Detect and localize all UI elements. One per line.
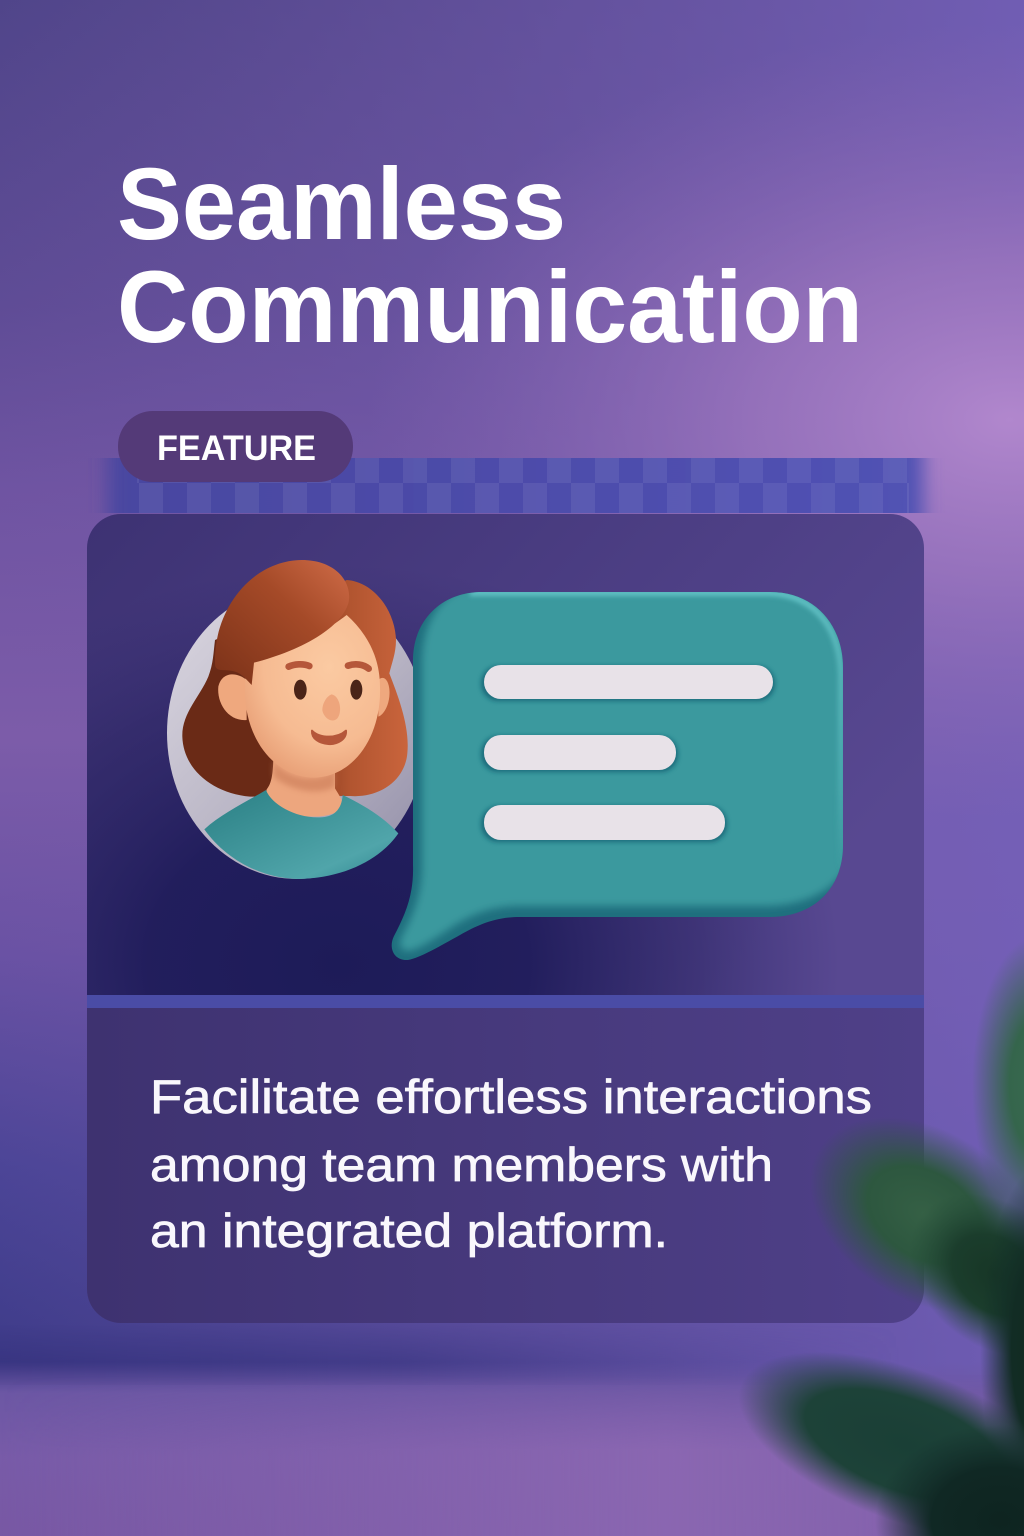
bottom panel (87, 1008, 924, 1323)
deep shadow (870, 1425, 1024, 1536)
neck (266, 753, 343, 817)
ears (218, 674, 390, 720)
eyebrows (289, 664, 369, 669)
middle leaf shadow (890, 1185, 1024, 1365)
top panel (87, 514, 924, 1323)
lower leaf (730, 1350, 1024, 1536)
avatar (167, 560, 427, 879)
front hair (215, 560, 349, 685)
middle leaf (790, 1110, 1024, 1330)
top leaf (960, 930, 1024, 1240)
back hair (182, 580, 408, 797)
bubble body (392, 592, 843, 960)
feature badge: FEATURE (157, 429, 316, 468)
title (117, 147, 863, 364)
dark stem (975, 1160, 1024, 1536)
main card (87, 514, 924, 1323)
checkered strip (108, 458, 923, 513)
blurred plant (730, 930, 1024, 1536)
mouth (312, 731, 346, 744)
bubble rim highlight (468, 592, 843, 816)
message lines (481, 665, 775, 842)
description: Facilitate effortless interactions (150, 1070, 872, 1123)
description: an integrated platform. (150, 1204, 668, 1257)
description: among team members with (150, 1138, 773, 1191)
shirt (204, 790, 398, 879)
eyes (294, 680, 362, 700)
face (245, 615, 380, 778)
chin shadow (273, 760, 335, 791)
speech bubble (392, 592, 843, 960)
avatar disc (167, 587, 427, 879)
title: Communication (117, 250, 863, 364)
nose (322, 694, 340, 720)
title: Seamless (117, 147, 566, 261)
description (150, 1070, 872, 1257)
feature badge (118, 411, 353, 482)
divider band (87, 995, 924, 1008)
